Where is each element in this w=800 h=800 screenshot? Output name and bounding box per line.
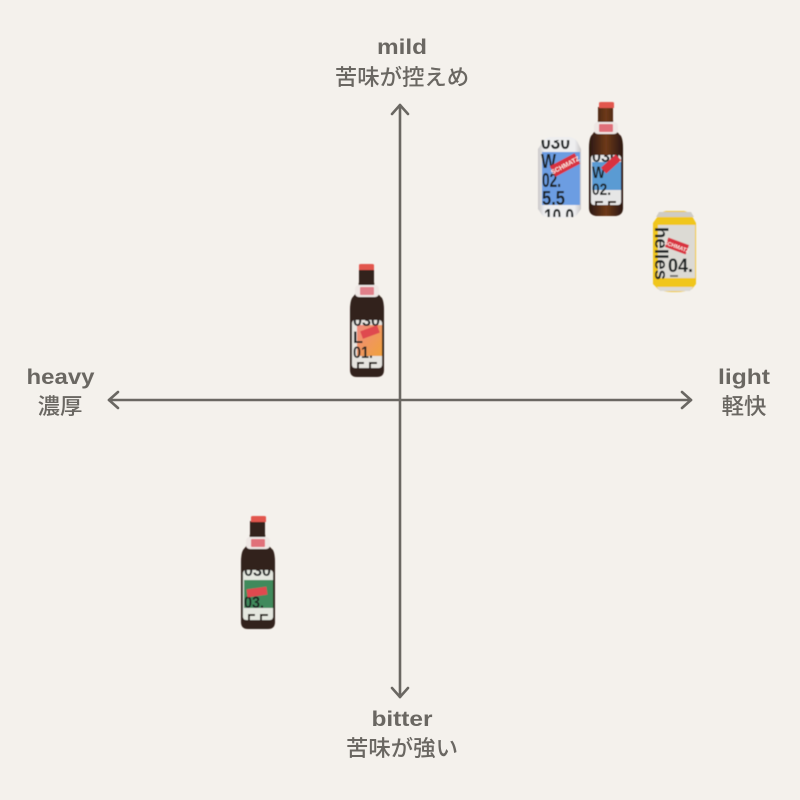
label: light xyxy=(718,366,770,421)
label: heavy: heavy xyxy=(26,366,95,389)
label: mild: mild xyxy=(377,36,427,59)
can: W 02: 5.5 xyxy=(542,188,565,210)
vertical axis arrow xyxy=(392,105,408,697)
bottle: W 02: W xyxy=(592,163,606,182)
can: W 02: W xyxy=(541,151,556,173)
label: light: light xyxy=(718,366,770,389)
label: bitter xyxy=(346,708,458,763)
can: helles 04: 04. xyxy=(668,256,693,277)
bottle: 03: 03. xyxy=(244,593,264,612)
bottle: 03: 030 xyxy=(244,561,271,580)
bottle: W 02: 030 xyxy=(592,147,619,166)
horizontal axis arrow xyxy=(109,392,691,408)
label: mild: 苦味が控えめ xyxy=(335,60,469,92)
can: helles 04: SCHMATZ xyxy=(663,240,691,255)
can: W 02: 02. xyxy=(542,170,561,192)
bottle: L 01: L xyxy=(353,328,363,347)
bottle: L 01: 030 xyxy=(353,311,380,330)
label: light: 軽快 xyxy=(722,389,766,421)
bottle: W 02 xyxy=(589,102,623,216)
bottle: L 01 xyxy=(350,264,384,377)
can: W 02: 10.0 xyxy=(544,206,574,228)
label: bitter: 苦味が強い xyxy=(346,731,458,763)
label: heavy xyxy=(26,366,95,421)
bottle: 03 xyxy=(241,516,275,629)
can: W 02: 030 xyxy=(541,132,570,154)
bottle: L 01: 01. xyxy=(353,343,373,362)
can: W 02 xyxy=(538,139,582,218)
can: helles 04 xyxy=(651,211,696,292)
label: bitter: bitter xyxy=(372,708,432,731)
label: heavy: 濃厚 xyxy=(38,389,82,421)
bottle: W 02: 02. xyxy=(592,180,611,199)
label: mild xyxy=(335,36,469,92)
can: helles 04: helles xyxy=(651,227,671,280)
can: W 02: SCHMATZ xyxy=(550,155,581,176)
